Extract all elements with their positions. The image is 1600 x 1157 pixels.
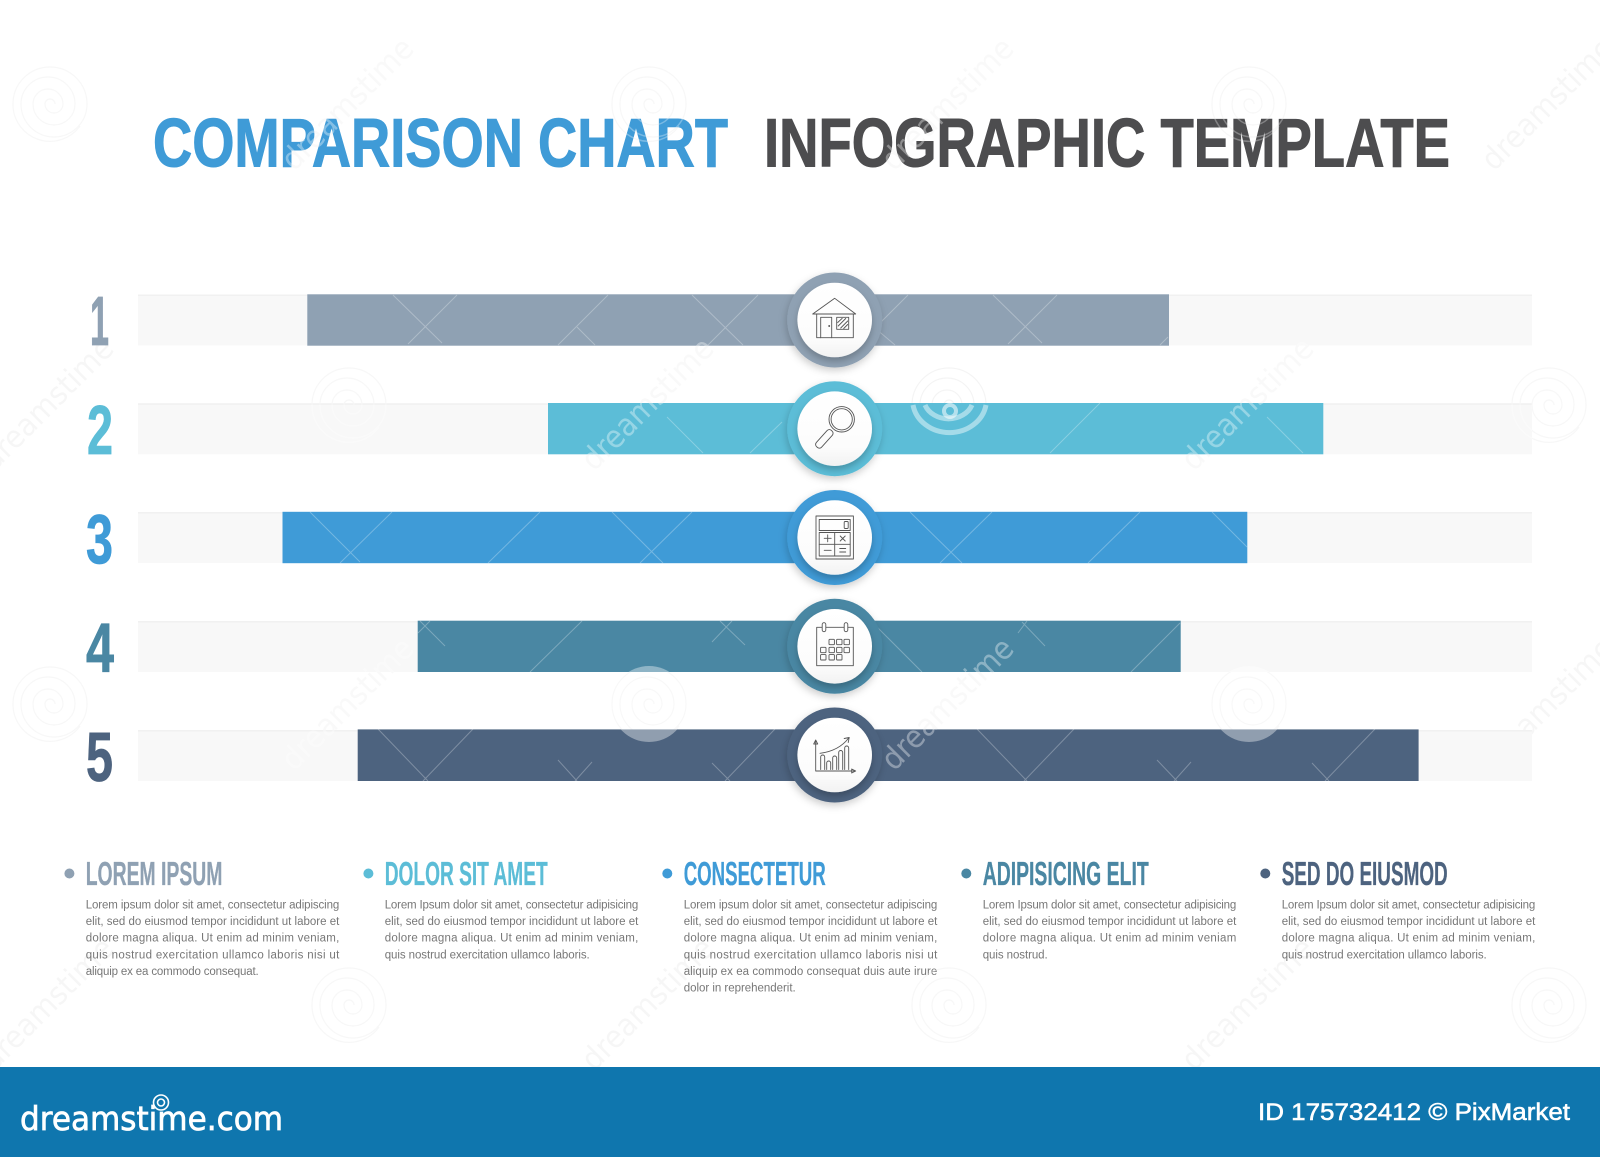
body text 2: quis nostrud exercitation ullamco laboris. [385,949,590,961]
infographic canvas: dreamstime [1174,931,1321,1078]
number 2: 2 [87,391,113,469]
body text 4: quis nostrud. [983,949,1048,961]
bar 5 [358,729,1419,781]
column 3: consectetur [662,856,938,995]
row 2 [87,391,1532,469]
bullet 4 [961,868,971,878]
title: COMPARISON CHART [153,104,728,182]
icon badge: calculator [787,490,882,585]
infographic canvas: dreamstime [1174,331,1321,478]
number 5: 5 [86,718,113,796]
icon: calculator [816,516,853,559]
row 1: 1 [90,282,109,360]
track 4 [138,621,1532,672]
body text 1: Lorem ipsum dolor sit amet, consectetur adipiscing [86,899,339,911]
body text 5: quis nostrud exercitation ullamco laboris. [1282,949,1487,961]
icon badge: house [787,272,882,368]
icon: calendar [817,623,853,666]
row 4 [86,609,1532,687]
number 3: 3 [86,500,113,578]
infographic canvas: dreamstime [1174,331,1321,478]
body text 4: dolore magna aliqua. Ut enim ad minim veniam [983,933,1236,945]
infographic canvas: dreamstime [574,931,721,1078]
body text 1: aliquip ex ea commodo consequat. [86,966,259,978]
body text 3: dolore magna aliqua. Ut enim ad minim veniam, [684,933,937,945]
body text 2: dolore magna aliqua. Ut enim ad minim veniam, [385,933,638,945]
heading 5: SED DO EIUSMOD [1282,856,1448,893]
column 4: adipisicing elit [961,856,1237,961]
infographic canvas: dreamstime [274,31,421,178]
infographic canvas: dreamstime [874,31,1021,178]
row 5 [86,718,1532,796]
body text 3: elit, sed do eiusmod tempor incididunt ut labore et [684,916,938,928]
body text 2: elit, sed do eiusmod tempor incididunt ut labore et [385,916,639,928]
bullet 2 [363,868,373,878]
body text 1: elit, sed do eiusmod tempor incididunt ut labore et [86,916,340,928]
icon badge: growth chart [787,708,882,802]
body text 4: elit, sed do eiusmod tempor incididunt ut labore et [983,916,1237,928]
footer band [0,1067,1600,1157]
body text 1 [86,899,340,978]
bar 1 [307,294,1169,346]
column 5: sed do eiusmod [1260,856,1536,961]
body text 5: dolore magna aliqua. Ut enim ad minim veniam, [1282,933,1535,945]
body text 3: dolor in reprehenderit. [684,983,796,995]
row 3 [86,500,1532,578]
infographic canvas: dreamstime [274,631,421,778]
body text 3: aliquip ex ea commodo consequat duis aute irure [684,966,937,978]
bullet 1 [64,868,74,878]
bar 3 [282,512,1247,563]
icon: magnifier [814,407,854,449]
heading 3: CONSECTETUR [684,856,826,893]
body text 1: dolore magna aliqua. Ut enim ad minim veniam, [86,933,339,945]
icon: house [813,298,856,338]
body text 5 [1282,899,1536,961]
icon badge: calendar [787,599,882,694]
infographic canvas: dreamstime [574,331,721,478]
column 1: lorem ipsum [64,856,340,978]
infographic canvas: dreamstime [874,631,1021,778]
infographic canvas: dreamstime [874,31,1021,178]
heading 2: DOLOR SIT AMET [385,856,548,893]
body text 3: Lorem ipsum dolor sit amet, consectetur adipiscing [684,899,937,911]
row 1 [90,282,1532,360]
icon badge: magnifier [787,381,882,476]
bar 2 [548,403,1323,454]
track 2 [138,403,1532,454]
title [153,104,1450,182]
body text 3 [684,899,938,995]
bar 4 [418,621,1181,672]
body text 2 [385,899,639,961]
heading 1: LOREM IPSUM [86,856,222,893]
body text 5: Lorem Ipsum dolor sit amet, consectetur adipisicing [1282,899,1535,911]
body text 4 [983,899,1237,961]
infographic canvas: dreamstime [274,631,421,778]
body text 1: quis nostrud exercitation ullamco laboris nisi ut [86,949,340,961]
bullet 3 [662,868,672,878]
comparison chart [86,282,1532,796]
heading 4: ADIPISICING ELIT [983,856,1149,893]
infographic canvas: dreamstime [574,331,721,478]
infographic canvas: dreamstime [874,631,1021,778]
footer logo text: dreamstime.com [20,1099,283,1138]
track 3 [138,512,1532,563]
body text 5: elit, sed do eiusmod tempor incididunt ut labore et [1282,916,1536,928]
number 4: 4 [86,609,114,687]
body text 3: quis nostrud exercitation ullamco laboris nisi ut [684,949,938,961]
body text 4: Lorem Ipsum dolor sit amet, consectetur adipisicing [983,899,1236,911]
column 2: dolor sit amet [363,856,639,961]
track 5 [138,730,1532,781]
infographic canvas: dreamstime [274,31,421,178]
image id and credit: ID 175732412 © PixMarket [1258,1099,1570,1126]
bullet 5 [1260,868,1270,878]
icon: growth chart [814,738,856,773]
body text 2: Lorem Ipsum dolor sit amet, consectetur adipisicing [385,899,638,911]
icon: logo spiral [154,1095,168,1110]
track 1 [138,294,1532,346]
